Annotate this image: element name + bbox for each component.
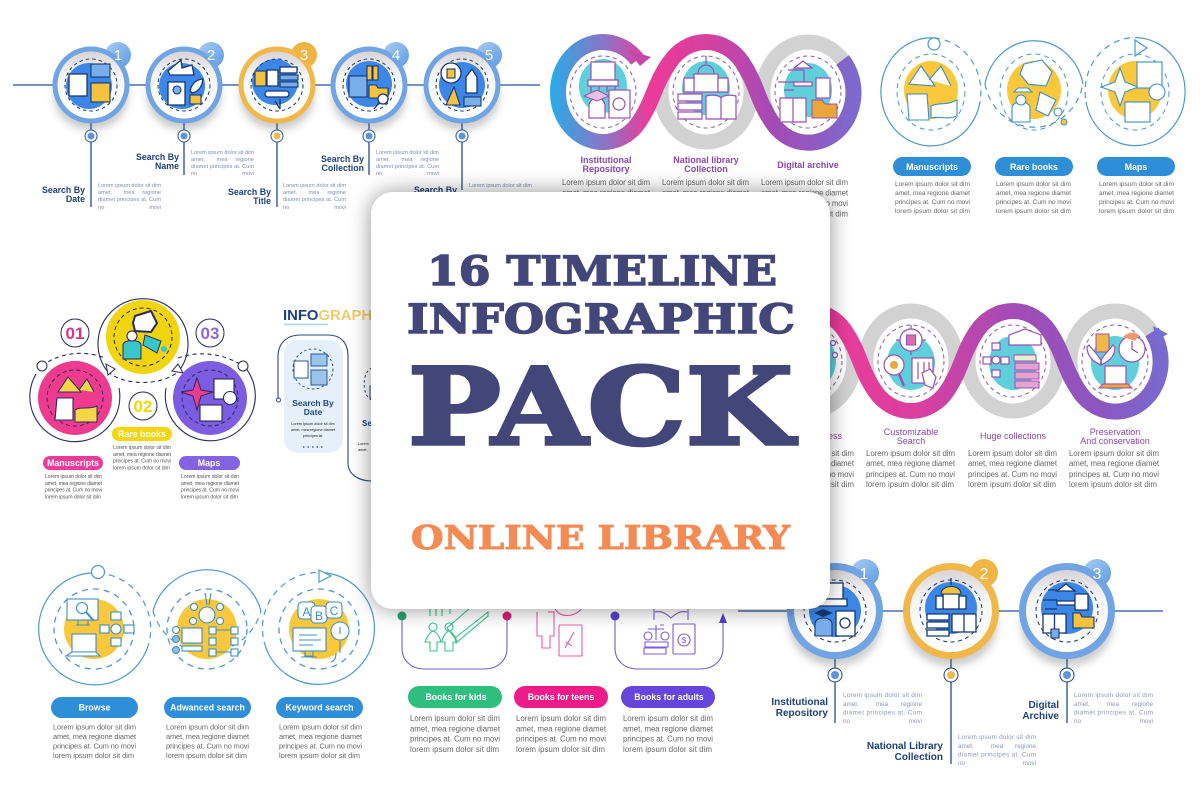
step descriptions: Lorem ipsum dolor sit dim [98,183,161,189]
ribbon descriptions: principes at. Cum no movi [761,199,848,208]
step headings: Search By [42,185,85,195]
step descriptions: diamet principes at. Cum [843,710,922,716]
ribbon descriptions: Lorem ipsum dolor sit dim [1069,449,1159,458]
icon: institutional repository [570,56,636,128]
step 2: national library: 2 [980,566,989,583]
step descriptions: mea [876,701,889,708]
icon: digital archive [775,56,841,128]
pill descriptions: amet, mea regione diamet [623,724,714,734]
step headings: Repository [776,708,828,719]
pill descriptions: principes at. Cum no movi [53,742,136,750]
step descriptions: no [98,205,104,211]
pill descriptions [895,181,1175,215]
pill: manuscripts [43,456,103,470]
pill descriptions: lorem ipsum dolor sit dim [279,751,360,760]
ribbon descriptions: lorem ipsum dolor sit dim [1069,480,1157,489]
descriptions: amet, mea regione diamet [45,481,103,487]
step 5: 5 [485,47,493,64]
step descriptions: regione [327,190,346,196]
ribbon arrow tip [1153,326,1168,340]
step descriptions: no [843,718,851,725]
step 3 [238,42,317,130]
ribbon descriptions: amet, mea regione diamet [562,188,651,198]
step descriptions [843,692,1153,767]
ribbon descriptions: Lorem ipsum dolor sit dim [968,449,1057,458]
outline ring 2 [985,41,1083,127]
step descriptions: mea [124,190,135,196]
pill labels [425,692,704,702]
card: second search step: amet, [358,448,368,452]
pill labels: Rare books [1010,162,1058,172]
ribbon descriptions: principes at. Cum no movi [765,470,854,479]
badge 03 [196,319,224,347]
pill labels: Books for teens [528,692,594,702]
title line: pack: PACK [408,344,798,469]
step descriptions: movi [1023,760,1036,767]
arrow marker [319,570,331,582]
ribbon descriptions: amet, mea regione diamet [1069,459,1160,468]
ribbon descriptions: principes at. Cum no movi [968,470,1057,479]
panel: manuscripts rare books maps, outlined [881,38,1185,215]
timeline axis [13,84,540,86]
card: second search step: Lorem [358,442,369,446]
step descriptions: no [191,171,197,177]
gradient ribbon [558,42,853,143]
icon: keyword search: C [330,604,339,618]
descriptions: lorem ipsum dolor sit dim [45,494,101,500]
pills: kids, teens, adults [408,686,715,708]
title line: infographic: INFOGRAPHIC [407,296,795,343]
ribbon labels: Collection [684,164,728,174]
step descriptions: regione [235,157,254,163]
panel: numbered colored circles [30,299,255,500]
step descriptions: amet, [98,190,112,196]
step descriptions: amet, [376,157,390,163]
ribbon labels: Digital archive [777,160,839,170]
marker dots [88,132,466,140]
ribbon labels: Institutional [580,155,632,165]
outline ring 3 [1085,38,1185,146]
arrow markers [37,361,248,375]
step 1: 1 [114,47,122,64]
descriptions: amet, mea regione diamet [113,452,172,458]
ribbon labels: National library [673,155,739,165]
step descriptions [98,150,532,211]
outline ring 1 [881,38,981,146]
pill descriptions [53,722,362,760]
pill descriptions: Lorem ipsum dolor sit dim [516,714,606,723]
step descriptions: regione [1015,743,1036,750]
card: search by date: Lorem ipsum dolor sit dim [291,422,335,426]
ribbon descriptions: lorem ipsum dolor sit dim [765,480,854,489]
step descriptions: movi [242,171,254,177]
pill descriptions [410,714,714,754]
pill descriptions: lorem ipsum dolor sit dim [166,751,247,760]
descriptions: principes at. Cum no movi [181,488,239,494]
ribbon descriptions: lorem ipsum dolor sit dim [968,480,1056,489]
card: search by date [284,340,343,453]
badge 03: 03 [201,324,219,343]
step descriptions: amet, [1074,701,1090,708]
icon: huge collections [980,325,1046,397]
step descriptions: no [376,171,382,177]
step descriptions: regione [142,190,161,196]
step headings: Collection [895,752,943,763]
ribbon labels: Preservation [1090,427,1140,437]
ribbon descriptions [562,178,849,218]
icon: keyword search [279,589,359,669]
pill descriptions: amet, mea regione diamet [895,190,970,197]
step 3: 3 [300,47,308,64]
step descriptions: mea [991,743,1004,750]
ribbon labels [828,427,1150,446]
heading: INFOGRAPHIC [283,307,387,324]
pill descriptions: amet, mea regione diamet [516,724,607,734]
pill descriptions: Lorem ipsum dolor sit dim [166,722,249,732]
step descriptions: Lorem ipsum dolor sit dim [958,734,1036,741]
ribbon descriptions [765,449,1160,489]
symbol: dollar: $ [682,636,687,645]
pills: browse, advanced, keyword [51,697,363,718]
badge 02: 02 [134,397,152,416]
ribbon descriptions: Lorem ipsum dolor sit dim [765,449,854,458]
ribbon descriptions: amet, mea regione diamet [866,459,956,468]
pill labels: Manuscripts [906,162,958,172]
outline ring 2 [153,570,261,652]
step headings: Archive [1022,711,1059,722]
step descriptions: diamet principes at. Cum [283,197,346,203]
step headings: Digital [1028,700,1059,711]
step headings: Search By [136,152,179,162]
panel: books by age group [398,608,727,754]
pill descriptions: amet, mea regione diamet [410,724,501,734]
ribbon descriptions: Lorem ipsum dolor sit dim [562,178,650,187]
step descriptions: Lorem ipsum dolor sit dim [376,150,439,156]
card: second search step: Se [362,419,372,428]
pill descriptions: Lorem ipsum dolor sit dim [996,181,1072,188]
step connectors [835,655,1067,764]
pill descriptions: principes at. Cum no movi [1099,199,1175,206]
ribbon labels: Huge collections [980,431,1047,441]
step 1: institutional repository [787,559,883,666]
step headings: Title [253,196,271,206]
step markers [828,668,1074,682]
descriptions: Lorem ipsum dolor sit dim [181,474,239,480]
step descriptions: amet, [843,701,859,708]
step headings [771,697,1059,763]
grey rings [764,311,1160,411]
ribbon labels: Search [897,436,925,446]
pill descriptions: principes at. Cum no movi [279,742,362,750]
pill: rare books: Rare books [118,429,166,439]
pill descriptions: lorem ipsum dolor sit dim [53,751,134,760]
grey rings [661,42,853,142]
ribbon labels [580,155,839,174]
ribbon labels: ess [828,431,842,441]
ribbon descriptions: Lorem ipsum dolor sit dim [761,178,848,187]
step descriptions: movi [149,205,161,211]
colored circle: manuscripts [38,361,112,435]
panel: five step search timeline [13,42,540,211]
pill descriptions: lorem ipsum dolor sit dim [996,208,1072,215]
step descriptions: Lorem ipsum dolor sit dim [843,692,922,699]
pill descriptions: principes at. Cum no movi [410,734,500,744]
gradient ribbon [809,311,1161,412]
panel: browse and search [39,566,374,760]
pill descriptions: lorem ipsum dolor sit dim [410,745,499,754]
step 4: 4 [392,47,400,64]
ribbon labels: Customizable [884,427,938,437]
step descriptions: diamet principes at. Cum [98,197,161,203]
step descriptions: Lorem ipsum dolor sit dim [283,183,346,189]
circle outlines [30,299,255,442]
descriptions: Lorem ipsum dolor sit dim [45,474,102,480]
pill descriptions: amet, mea regione diamet [996,190,1071,197]
ribbon descriptions: amet, mea regione diamet [761,188,849,198]
panel: ribbon timeline library benefits [764,311,1168,489]
pill descriptions: principes at. Cum no movi [623,734,713,744]
step connectors [91,120,462,207]
step descriptions: Lorem ipsum dolor sit dim [1074,692,1153,699]
step descriptions: diamet principes at. Cum [376,164,439,170]
pill labels: Books for adults [634,692,704,702]
pill descriptions: Lorem ipsum dolor sit dim [1099,181,1174,188]
pill: rare books [112,427,172,441]
partial first icon [776,325,842,397]
ribbon descriptions: amet, mea regione diamet [662,188,750,198]
ribbon descriptions: principes at. Cum no movi [866,470,955,479]
descriptions [45,445,240,500]
step headings: National Library [867,741,943,752]
u-shaped connectors [402,620,723,669]
pill labels: Adwanced search [170,702,245,712]
card: second search step [358,368,372,452]
ribbon descriptions: Lorem ipsum dolor sit dim [866,449,955,458]
badge 01 [61,319,89,347]
colored circle: maps [173,361,247,435]
step descriptions: movi [427,171,439,177]
pill descriptions: lorem ipsum dolor sit dim [516,745,605,754]
card: search by date: Date [304,407,322,417]
pill descriptions: principes at. Cum no movi [166,742,249,750]
descriptions: Lorem ipsum dolor sit dim [113,445,171,451]
connector line [278,335,372,481]
step headings: Collection [321,163,364,173]
step descriptions: mea [402,157,413,163]
panel: ribbon timeline institutional repository [558,42,853,219]
step descriptions: diamet principes at. Cum [191,164,254,170]
icon: adult books [644,608,695,654]
icon: customizable search [878,325,944,397]
step descriptions: diamet principes at. Cum [1074,710,1153,716]
connector dots [398,612,620,620]
start dot [276,398,280,402]
ribbon descriptions: lorem ipsum dolor sit dim [761,210,848,218]
subtitle: ONLINE LIBRARY [411,518,790,557]
step descriptions: amet, [283,190,297,196]
pill descriptions: Lorem ipsum dolor sit dim [410,714,500,723]
step descriptions: amet, [958,743,974,750]
pill descriptions: lorem ipsum dolor sit dim [895,208,970,215]
card: search by date: amet, mea regione diamet [291,428,336,432]
ribbon arrow tip [628,50,651,66]
pill descriptions: principes at. Cum no movi [996,199,1072,206]
step 1: institutional repository: 1 [860,566,869,583]
pill descriptions: amet, mea regione diamet [166,732,249,741]
pills: manuscripts, rare books, maps [893,157,1175,176]
ribbon descriptions: Lorem ipsum dolor sit dim [662,178,749,187]
step descriptions: movi [334,205,346,211]
timeline axis [738,610,1163,612]
step 5 [424,42,502,130]
ribbon descriptions: lorem ipsum dolor sit dim [866,480,954,489]
ribbon descriptions: amet, mea regione diamet [968,459,1058,468]
step descriptions: mea [1107,701,1120,708]
badge 01: 01 [66,324,84,343]
icon: kids books [425,608,488,651]
descriptions: principes at. Cum no movi [113,458,171,464]
step descriptions: Lorem ipsum dolor sit dim [191,150,254,156]
step descriptions: movi [1140,718,1153,725]
icon: national library [673,56,739,128]
pill descriptions: principes at. Cum no movi [516,734,606,744]
pill descriptions: lorem ipsum dolor sit dim [623,745,712,754]
pill labels: Books for kids [425,692,487,702]
icon: keyword search: A [302,605,311,619]
badge 02 [129,392,157,420]
ribbon labels: Repository [582,164,630,174]
step headings: Search By [414,185,457,195]
step headings: Search By [321,154,364,164]
step 2: national library [903,559,999,666]
card: search by date: Search By [292,398,334,408]
step descriptions: movi [909,718,922,725]
panel: infographic cards [276,307,387,481]
step descriptions: mea [217,157,228,163]
step descriptions: amet, [191,157,205,163]
step descriptions: Lorem ipsum dolor sit dim [469,183,532,189]
panel: three step library timeline [738,559,1163,767]
heading underline [284,324,328,326]
pill descriptions: amet, mea regione diamet [279,732,362,741]
step descriptions: mea [309,190,320,196]
colored circle: rare books [106,300,180,374]
pill labels: Maps [1125,162,1147,172]
pill descriptions: amet, mea regione diamet [53,732,136,741]
pill descriptions: Lorem ipsum dolor sit dim [895,181,970,188]
icon: teen books [537,608,582,656]
pill labels: Browse [79,702,110,712]
outline ring 1 [39,573,151,685]
step 3: digital archive: 3 [1093,566,1102,583]
step descriptions: no [283,205,289,211]
step descriptions: regione [901,701,922,708]
step 4 [330,42,409,130]
pill descriptions: Lorem ipsum dolor sit dim [623,714,713,723]
step headings: Search By [228,187,271,197]
icon: browse [54,589,134,669]
pill labels: Keyword search [286,702,353,712]
pill: maps [179,456,240,470]
title card [371,192,830,609]
pill descriptions: amet, mea regione diamet [1099,190,1174,197]
pill labels [79,702,353,712]
outline ring 3 [262,572,374,684]
title line: 16 timeline: 16 TIMELINE [427,248,777,295]
step descriptions: no [1074,718,1082,725]
ribbon descriptions: principes at. Cum no movi [1069,470,1159,479]
arrow marker [719,613,727,623]
pill descriptions: lorem ipsum dolor sit dim [1099,208,1174,215]
step descriptions: no [958,760,966,767]
step descriptions: regione [420,157,439,163]
step 2: 2 [207,47,215,64]
step descriptions: diamet principes at. Cum [958,752,1036,758]
marker dots [831,671,1071,679]
ribbon descriptions: amet, mea regione diamet [765,459,855,468]
pill descriptions: Lorem ipsum dolor sit dim [53,722,136,732]
ribbon labels: And conservation [1080,436,1150,446]
pill labels [906,162,1147,172]
icon: rare books [1000,54,1068,130]
pill: maps: Maps [198,458,220,468]
step descriptions: regione [1132,701,1153,708]
descriptions: amet, mea regione diamet [181,481,240,487]
pill: manuscripts: Manuscripts [47,458,99,468]
pill descriptions: Lorem ipsum dolor sit dim [279,722,362,732]
descriptions: principes at. Cum no movi [45,488,102,494]
step headings: Institutional [771,697,828,708]
step 3: digital archive [1019,559,1115,666]
start marker [92,566,104,578]
descriptions: lorem ipsum dolor sit dim [113,466,170,472]
icon: keyword search: B [315,609,323,623]
step markers [85,130,468,142]
step headings [42,152,457,206]
step headings: Date [66,194,85,204]
step 1 [52,42,131,130]
icon: manuscripts [897,54,965,130]
card: search by date: principes at. [303,434,323,438]
step 2 [146,42,224,130]
icon: maps [1101,54,1169,130]
descriptions: lorem ipsum dolor sit dim [181,494,238,500]
icon: advanced search [167,589,247,669]
icon: preservation [1082,325,1148,397]
step headings: Name [155,161,179,171]
pill descriptions: principes at. Cum no movi [895,199,971,206]
